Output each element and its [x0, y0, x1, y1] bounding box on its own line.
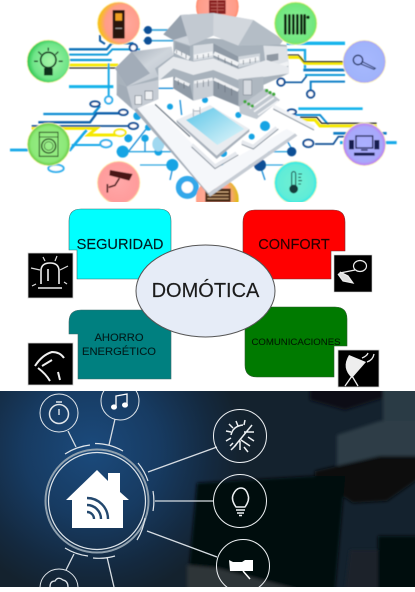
icon: key — [343, 40, 386, 83]
photo background — [0, 385, 415, 590]
panel: ahorro energético: ENERGÉTICO — [82, 345, 156, 358]
swimming pool — [186, 108, 244, 145]
panel: seguridad — [69, 209, 171, 279]
left wing — [126, 80, 160, 110]
icon: satellite dish — [338, 350, 379, 387]
house — [115, 13, 314, 197]
icon: washing machine — [27, 123, 70, 166]
illustration: smart home hub — [10, 0, 397, 220]
stairs and shrubs — [239, 88, 280, 119]
circuit nodes — [48, 26, 314, 196]
icon: light bulb — [214, 474, 266, 528]
photo panel: smart home network — [0, 382, 415, 592]
middle slab — [158, 57, 289, 81]
label: confort: CONFORT — [258, 237, 330, 253]
icon: shutter top — [196, 0, 239, 28]
icon: radiator — [274, 2, 317, 45]
icon: snowflake — [214, 410, 266, 462]
panel: comunicaciones — [245, 307, 347, 377]
icon: thermometer — [274, 161, 317, 204]
icon: security camera — [216, 540, 270, 592]
icon: security camera — [97, 161, 140, 204]
central ellipse: domótica: DOMÓTICA — [152, 279, 260, 302]
panel: confort — [243, 210, 345, 279]
icon: light bulb — [27, 40, 70, 83]
icon: fridge — [97, 2, 140, 45]
garden terrace — [137, 104, 295, 193]
diagram: domótica — [28, 209, 379, 387]
icon: cloud — [40, 568, 78, 587]
roofs — [175, 12, 218, 46]
label: seguridad: SEGURIDAD — [77, 237, 163, 253]
icon: comfort hairdryer — [334, 255, 372, 292]
icon: music note — [100, 391, 140, 420]
circuit wiring — [10, 30, 397, 180]
icon: stopwatch — [40, 394, 78, 432]
icon: wifi house — [66, 470, 129, 528]
icon: media system — [343, 123, 386, 166]
icon: shutter bottom — [196, 178, 239, 220]
panel: ahorro energético — [69, 310, 171, 379]
label: ahorro energético: AHORRO — [94, 332, 144, 344]
label: comunicaciones: COMUNICACIONES — [251, 337, 341, 348]
central ellipse: domótica — [136, 245, 275, 337]
icon: alarm beacon — [28, 253, 73, 298]
house body — [117, 38, 289, 110]
connector lines — [66, 419, 217, 587]
icon: energy hand — [28, 343, 73, 385]
hub ring — [46, 444, 154, 558]
